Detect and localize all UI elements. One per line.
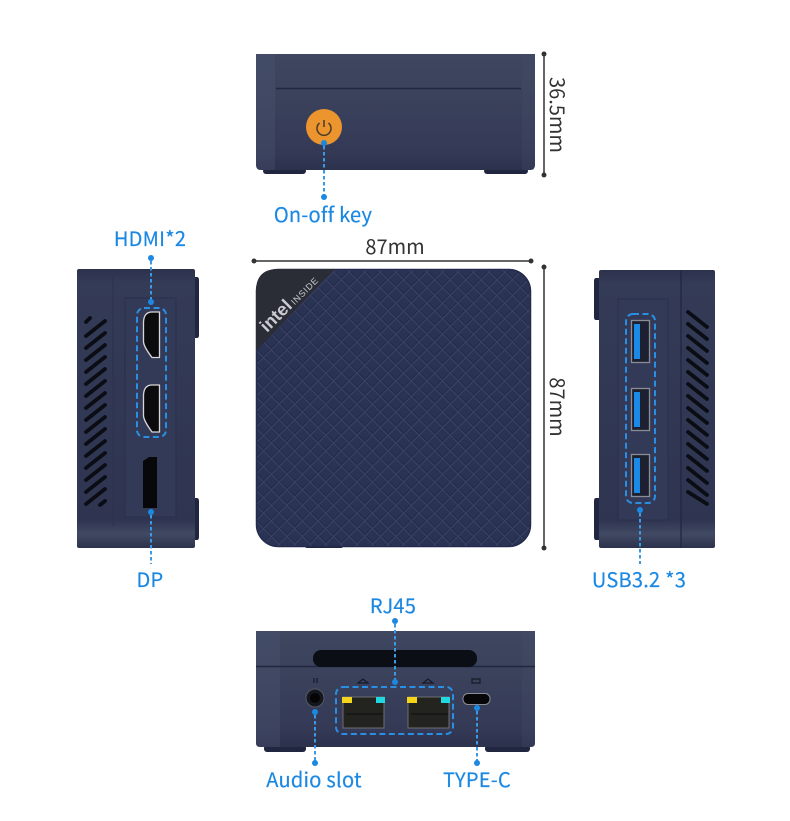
USB port 3 [632, 454, 650, 496]
icon: orange power button [306, 109, 342, 145]
callout: TYPE-C: TYPE-C [443, 764, 511, 793]
dimension: width 87mm: 87mm [365, 231, 425, 260]
callout: USB3.2 *3: USB3.2 *3 [592, 564, 686, 593]
callout: audio slot: Audio slot [266, 764, 362, 793]
dimension: depth 87mm [542, 264, 573, 550]
callout: HDMI*2: HDMI*2 [114, 223, 186, 252]
HDMI port 2 [144, 385, 160, 432]
vents [86, 318, 105, 505]
panel: right side view [594, 270, 715, 548]
callout: HDMI*2 [114, 223, 186, 437]
dimension: height 36.5mm: 36.5mm [544, 77, 573, 153]
USB port 2 [632, 388, 650, 430]
intel inside corner badge: intelINSIDE [256, 269, 322, 336]
callout: RJ45 [336, 590, 453, 734]
USB-C port [463, 694, 490, 704]
HDMI port 1 [144, 312, 160, 358]
RJ45 port 2 [407, 697, 450, 728]
panel: rear view [256, 631, 535, 752]
callout: TYPE-C [443, 705, 511, 793]
callout: DP [137, 509, 163, 593]
callout: DP: DP [137, 564, 163, 593]
dimension: depth 87mm: 87mm [544, 377, 573, 437]
dimension: height 36.5mm [542, 52, 573, 178]
USB port 1 [632, 320, 650, 362]
vents [688, 312, 707, 504]
DP port [143, 457, 157, 508]
RJ45 port 1 [342, 697, 385, 728]
panel: left side view [77, 269, 199, 548]
dimension: width 87mm [252, 231, 534, 264]
callout: audio slot [266, 709, 362, 793]
panel: center top view with textured lid [256, 269, 531, 548]
callout: on-off key: On-off key [274, 199, 372, 228]
callout: RJ45: RJ45 [370, 590, 416, 619]
intel inside corner badge [256, 269, 335, 351]
small port glyphs [314, 678, 480, 683]
audio jack [306, 689, 324, 707]
callout: USB3.2 *3 [592, 314, 686, 593]
vent slot [313, 650, 477, 667]
panel: top view (front with power key) [256, 54, 535, 174]
callout: on-off key [274, 140, 372, 228]
